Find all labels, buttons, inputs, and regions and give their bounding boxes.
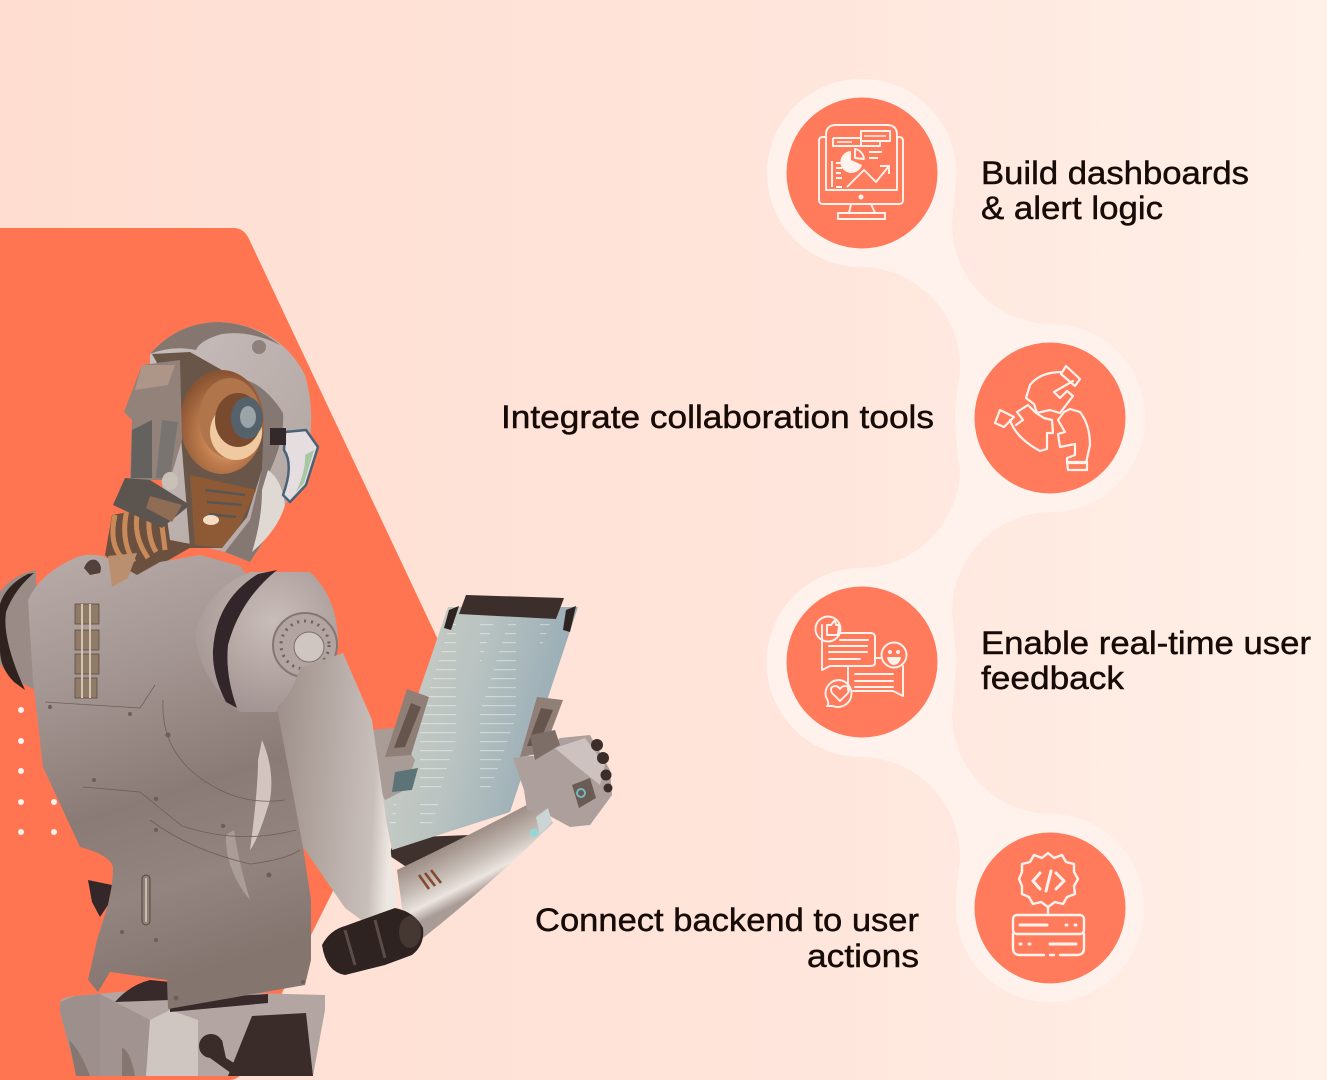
robot: right shoulder [195,570,338,712]
decorative dot grid [18,707,57,835]
robot: helmet and face [113,322,318,562]
step 1: dashboards [786,98,938,248]
robot: right hand [513,697,612,837]
connector ribbon [767,79,1145,1002]
robot: back vents [75,553,150,925]
robot: tablet with code [382,595,578,876]
robot: neck wires [105,505,195,580]
circle badge 3 [786,586,938,738]
circle badge 4 [974,832,1126,984]
label: connect backend to user actions: actions [807,938,919,974]
robot: upper arm [277,653,398,924]
robot: left hand and clamp [370,689,429,800]
robot: base [60,980,325,1076]
circle badge 2 [974,342,1126,494]
robot: torso [28,555,311,1009]
robot: mechanical face parts [113,360,190,528]
label: build dashboards: & alert logic [981,190,1163,226]
robot: copper head cavity [152,352,264,548]
label: connect backend to user actions [535,902,919,974]
robot: wrist joint [322,908,423,975]
step 3: feedback [786,586,938,738]
circle badge 1 [786,98,938,248]
label: build dashboards: Build dashboards [981,155,1249,191]
robot: left elbow joint [88,880,112,917]
panel: orange hexagon behind robot [0,228,448,1080]
step 4: backend [974,832,1126,984]
step 2: collaboration [974,342,1126,494]
label: integrate collaboration tools: Integrate collaboration tools [501,399,934,435]
robot: torso highlights and panel lines [45,685,305,1000]
label: build dashboards [981,155,1249,226]
label: enable real-time user feedback [981,625,1311,696]
robot illustration [0,322,612,1076]
label: enable real-time user feedback: feedback [981,660,1125,696]
label: connect backend to user actions: Connect backend to user [535,902,919,938]
icon: hands joining puzzle pieces [995,366,1090,470]
icon: gear with code over server [1013,853,1084,955]
robot: base connector [199,1013,313,1076]
robot: left shoulder [0,570,36,690]
robot: visor [283,430,318,502]
label: enable real-time user feedback: Enable real-time user [981,625,1311,661]
icon: monitor with charts [819,125,903,219]
robot: forearm [397,798,553,938]
icon: speech bubbles with reactions [816,616,906,707]
robot: forearm vents [419,870,441,889]
